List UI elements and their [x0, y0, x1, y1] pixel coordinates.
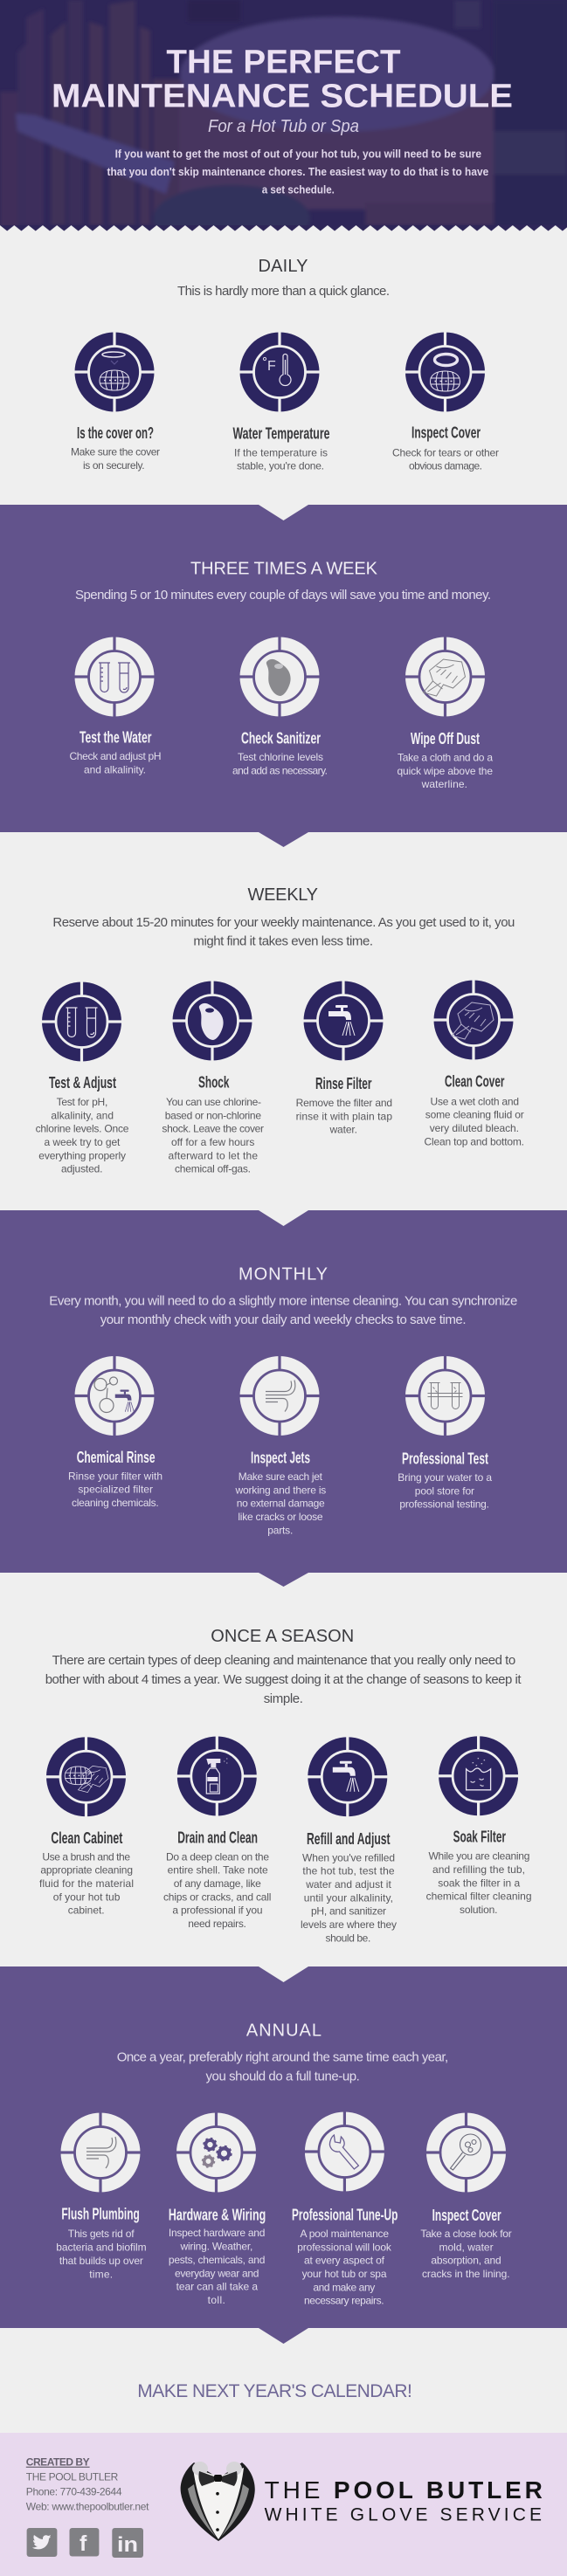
intro text [107, 148, 488, 196]
icon: jet streams [239, 1355, 320, 1436]
item: inspect cover: Inspect Cover [411, 424, 481, 442]
item: drain and clean: Do a deep clean on the [166, 1850, 269, 1863]
item: inspect jets: Inspect Jets [251, 1450, 310, 1467]
notch arrow: closing [259, 2328, 308, 2344]
item: clean cabinet: fluid for the material [39, 1877, 134, 1890]
intro: weekly: Reserve about 15-20 minutes for your weekly maintenance. As you get used to it, you [52, 915, 515, 930]
icon: thermometer [239, 332, 320, 412]
icon: magnifying glass [426, 2112, 507, 2193]
item: test the water [70, 637, 161, 776]
item: shock: Shock [198, 1073, 230, 1091]
item: professional tune-up: your hot tub or spa [302, 2268, 387, 2280]
notch arrow: once a season [259, 1573, 308, 1587]
item: water temperature: If the temperature is [234, 446, 328, 458]
item: inspect cover [420, 2112, 512, 2280]
icon: tub and cloth [45, 1737, 126, 1817]
icon: faucet [308, 1737, 388, 1817]
item: shock [162, 981, 264, 1175]
item: hardware and wiring [169, 2112, 266, 2306]
item: check sanitizer [232, 637, 328, 776]
item: clean cabinet: appropriate cleaning [40, 1864, 133, 1877]
panel background: annual [0, 1966, 567, 2328]
item: hardware and wiring: wiring. Weather, [180, 2241, 252, 2253]
logo wordmark: WHITE GLOVE SERVICE [265, 2505, 542, 2525]
item: hardware and wiring: everyday wear and [175, 2267, 259, 2279]
item: inspect cover: absorption, and [431, 2255, 501, 2267]
icon: wrench [304, 2111, 384, 2192]
item: test the water: Check and adjust pH [70, 750, 161, 762]
item: flush plumbing: bacteria and biofilm [56, 2241, 147, 2253]
item: rinse filter: water. [328, 1124, 357, 1136]
item: chemical rinse [68, 1355, 162, 1509]
item: test the water: and alkalinity. [84, 764, 146, 776]
item: clean cabinet [39, 1737, 134, 1917]
intro: weekly [52, 915, 515, 949]
icon: cover above tub [74, 332, 155, 412]
item: refill and adjust: until your alkalinity, [304, 1891, 393, 1904]
item: chemical rinse: cleaning chemicals. [72, 1497, 159, 1509]
item: is the cover on: is on securely. [83, 459, 145, 472]
panel background: three times a week [0, 505, 567, 832]
title: MAINTENANCE SCHEDULE [52, 78, 513, 114]
item: test and adjust: everything properly [38, 1149, 126, 1161]
item: test and adjust: alkalinity, and [51, 1109, 114, 1121]
section: once a season [39, 1573, 531, 1944]
item: drain and clean: of any damage, like [174, 1877, 261, 1890]
item: refill and adjust: water and adjust it [305, 1878, 391, 1891]
item: soak filter: and refilling the tub, [432, 1863, 525, 1876]
icon: spray bottle [176, 1736, 257, 1816]
item: refill and adjust: should be. [325, 1932, 370, 1944]
item: rinse filter: rinse it with plain tap [296, 1110, 392, 1122]
title: THE PERFECT [166, 44, 401, 80]
item: test and adjust: adjusted. [61, 1163, 103, 1175]
hero photo background [0, 0, 567, 251]
logo: tuxedo [181, 2462, 255, 2541]
section: weekly [36, 832, 524, 1175]
item: professional test: Professional Test [402, 1450, 488, 1467]
credits: Web: www.thepoolbutler.net [26, 2501, 149, 2513]
item: refill and adjust [301, 1737, 397, 1944]
item: shock: chemical off-gas. [175, 1163, 251, 1175]
item: test and adjust: a week try to get [44, 1136, 121, 1148]
icon: test tubes [74, 637, 155, 717]
item: check sanitizer: Test chlorine levels [238, 751, 323, 763]
item: inspect cover: Inspect Cover [432, 2207, 501, 2224]
item: refill and adjust: levels are where they [301, 1918, 397, 1931]
heading: once a season: ONCE A SEASON [211, 1627, 354, 1646]
item: inspect cover: obvious damage. [409, 460, 482, 472]
item: soak filter: Soak Filter [453, 1828, 506, 1845]
item: clean cabinet: cabinet. [68, 1904, 105, 1917]
item: test and adjust: Test for pH, [57, 1096, 107, 1108]
icon: linkedin [112, 2528, 143, 2558]
item: test the water: Test the Water [80, 729, 152, 747]
section: daily [71, 257, 499, 472]
intro: monthly: your monthly check with your daily and weekly checks to save time. [100, 1312, 466, 1327]
item: wipe off dust: Wipe Off Dust [411, 730, 480, 747]
item: shock: You can use chlorine- [166, 1096, 261, 1108]
item: soak filter: While you are cleaning [428, 1850, 529, 1863]
icon: hand with cloth [405, 637, 486, 717]
item: professional test: professional testing. [399, 1498, 489, 1511]
item: refill and adjust: Refill and Adjust [307, 1830, 391, 1848]
item: test and adjust: chlorine levels. Once [36, 1123, 129, 1135]
intro text: If you want to get the most of out of your hot tub, you will need to be sure [115, 148, 481, 160]
item: inspect jets: Make sure each jet [239, 1471, 323, 1483]
item: refill and adjust: the hot tub, test the [302, 1865, 395, 1877]
item: professional test [398, 1355, 492, 1511]
heading: three times a week: THREE TIMES A WEEK [190, 560, 378, 579]
item: chemical rinse: Rinse your filter with [68, 1470, 162, 1482]
icon: soaking basin [439, 1736, 519, 1816]
heading: weekly: WEEKLY [248, 885, 318, 905]
item: flush plumbing: time. [89, 2268, 113, 2280]
item: water temperature: stable, you're done. [237, 460, 324, 472]
credits: CREATED BY [26, 2456, 90, 2469]
item: chemical rinse: Chemical Rinse [77, 1449, 156, 1466]
item: drain and clean: chips or cracks, and call [163, 1891, 271, 1903]
heading: monthly: MONTHLY [239, 1265, 328, 1285]
item: refill and adjust: When you've refilled [302, 1851, 395, 1863]
icon: gears [176, 2112, 257, 2193]
item: professional tune-up: necessary repairs. [304, 2295, 384, 2307]
item: inspect cover: Take a close look for [420, 2228, 512, 2240]
item: refill and adjust: pH, and sanitizer [311, 1905, 386, 1918]
icon: facebook [70, 2528, 99, 2557]
intro text: that you don't skip maintenance chores. The easiest way to do that is to have [107, 166, 488, 178]
title [52, 44, 513, 114]
icon: faucet [303, 981, 384, 1061]
intro: annual: you should do a full tune-up. [206, 2069, 360, 2084]
icon: twitter [27, 2528, 57, 2557]
intro: annual: Once a year, preferably right around the same time each year, [117, 2049, 448, 2064]
intro text: a set schedule. [262, 183, 335, 196]
item: chemical rinse: specialized filter [78, 1484, 153, 1496]
logo wordmark [265, 2476, 543, 2525]
item: drain and clean: entire shell. Take note [168, 1864, 268, 1877]
item: flush plumbing: This gets rid of [68, 2228, 135, 2240]
heading: annual: ANNUAL [246, 2022, 322, 2041]
intro: monthly: Every month, you will need to do a slightly more intense cleaning. You can synchronize [49, 1293, 517, 1308]
intro: once a season: There are certain types of deep cleaning and maintenance that you really only need to [52, 1653, 515, 1668]
item: inspect jets [234, 1355, 326, 1536]
item: professional tune-up: Professional Tune-Up [292, 2206, 398, 2223]
intro: annual [117, 2049, 448, 2084]
subtitle: For a Hot Tub or Spa [208, 117, 359, 136]
item: wipe off dust: waterline. [421, 778, 467, 790]
item: professional tune-up: at every aspect of [304, 2255, 385, 2267]
item: inspect cover: mold, water [439, 2241, 494, 2253]
item: check sanitizer: Check Sanitizer [241, 730, 321, 747]
item: clean cover: Clean top and bottom. [425, 1135, 524, 1147]
item: water temperature: Water Temperature [232, 424, 330, 442]
item: inspect cover [392, 332, 499, 472]
item: hardware and wiring: pests, chemicals, and [169, 2254, 265, 2266]
item: flush plumbing: that builds up over [59, 2255, 143, 2267]
intro: once a season: simple. [264, 1691, 303, 1706]
item: professional tune-up [292, 2111, 398, 2307]
icon: test tubes [42, 981, 122, 1062]
item: professional tune-up: and make any [313, 2281, 375, 2293]
item: professional tune-up: A pool maintenance [301, 2228, 389, 2240]
item: test and adjust: Test & Adjust [49, 1074, 116, 1092]
item: hardware and wiring: Inspect hardware and [169, 2227, 265, 2239]
icon: facebook: f [80, 2531, 87, 2556]
closing call to action: MAKE NEXT YEAR'S CALENDAR! [137, 2381, 412, 2401]
panel background: monthly [0, 1210, 567, 1573]
icon: hand with cloth [433, 980, 514, 1060]
item: wipe off dust: quick wipe above the [397, 765, 493, 777]
item: shock: off for a few hours [171, 1136, 254, 1148]
item: is the cover on: Make sure the cover [71, 446, 160, 458]
icon: tub with thick lid [405, 332, 486, 412]
item: clean cover: Use a wet cloth and [430, 1095, 519, 1107]
item: inspect cover: Check for tears or other [392, 446, 499, 458]
footer [0, 2433, 567, 2576]
item: soak filter: chemical filter cleaning [426, 1891, 531, 1903]
item: professional test: pool store for [415, 1484, 474, 1497]
item: hardware and wiring: toll. [208, 2294, 225, 2306]
item: rinse filter: Rinse Filter [315, 1075, 372, 1092]
item: inspect jets: like cracks or loose [238, 1511, 323, 1523]
item: inspect jets: no external damage [237, 1498, 325, 1510]
icon: test tube rack [405, 1355, 486, 1436]
item: shock: shock. Leave the cover [162, 1123, 264, 1135]
item: clean cabinet: of your hot tub [53, 1891, 121, 1903]
item: clean cabinet: Clean Cabinet [51, 1829, 122, 1847]
item: professional test: Bring your water to a [398, 1471, 492, 1484]
icon: thermometer: F [267, 359, 276, 374]
item: professional tune-up: professional will look [297, 2241, 392, 2253]
item: check sanitizer: and add as necessary. [232, 764, 328, 776]
item: drain and clean: a professional if you [172, 1904, 262, 1917]
item: clean cover: very diluted bleach. [430, 1122, 519, 1134]
item: clean cover [425, 980, 524, 1147]
footer background [0, 2433, 567, 2576]
section: monthly [0, 1210, 567, 1573]
intro: daily: This is hardly more than a quick glance. [177, 284, 390, 299]
item: rinse filter [296, 981, 392, 1136]
item: rinse filter: Remove the filter and [296, 1097, 392, 1109]
intro: once a season [45, 1653, 522, 1706]
icon: linkedin: in [117, 2533, 138, 2557]
item: drain and clean: Drain and Clean [177, 1829, 258, 1846]
item: hardware and wiring: Hardware & Wiring [169, 2206, 266, 2223]
intro: once a season: bother with about 4 times a year. We suggest doing it at the change of seasons to keep it [45, 1672, 522, 1687]
icon: sanitizer blob [239, 637, 320, 717]
section: annual [0, 1966, 567, 2328]
item: is the cover on [71, 332, 160, 472]
heading: daily: DAILY [259, 257, 308, 276]
item: soak filter: soak the filter in a [438, 1877, 521, 1889]
item: inspect cover: cracks in the lining. [422, 2268, 510, 2280]
item: drain and clean [163, 1736, 271, 1930]
item: soak filter [426, 1736, 531, 1916]
credits: THE POOL BUTLER [26, 2471, 119, 2483]
item: clean cover: some cleaning fluid or [425, 1109, 524, 1121]
icon: flow streams [60, 2112, 141, 2193]
item: soak filter: solution. [460, 1904, 498, 1916]
item: shock: afterward to let the [168, 1149, 258, 1161]
item: is the cover on: Is the cover on? [77, 424, 154, 442]
icon: bubbles and faucet [74, 1355, 155, 1436]
credits [26, 2456, 149, 2513]
item: inspect jets: working and there is [234, 1484, 326, 1496]
intro: monthly [49, 1293, 517, 1327]
item: shock: based or non-chlorine [165, 1109, 261, 1121]
item: hardware and wiring: tear can all take a [176, 2281, 258, 2293]
credits: Phone: 770-439-2644 [26, 2486, 122, 2498]
item: clean cover: Clean Cover [445, 1073, 504, 1091]
notch arrow: weekly [259, 832, 308, 847]
item: drain and clean: need repairs. [188, 1918, 246, 1930]
item: clean cabinet: Use a brush and the [42, 1850, 130, 1863]
intro: three times a week: Spending 5 or 10 minutes every couple of days will save you time and money. [75, 588, 491, 603]
item: inspect jets: parts. [267, 1524, 293, 1536]
icon: shock blob [172, 981, 252, 1061]
item: water temperature [232, 332, 330, 472]
item: flush plumbing: Flush Plumbing [61, 2206, 140, 2223]
intro: weekly: might find it takes even less time. [193, 934, 373, 949]
hero banner [0, 0, 567, 251]
section: three times a week [0, 505, 567, 832]
item: wipe off dust: Take a cloth and do a [398, 752, 493, 764]
logo wordmark: THE POOL BUTLER [265, 2476, 543, 2504]
item: wipe off dust [397, 637, 493, 790]
item: flush plumbing [56, 2112, 147, 2280]
item: test and adjust [36, 981, 129, 1175]
